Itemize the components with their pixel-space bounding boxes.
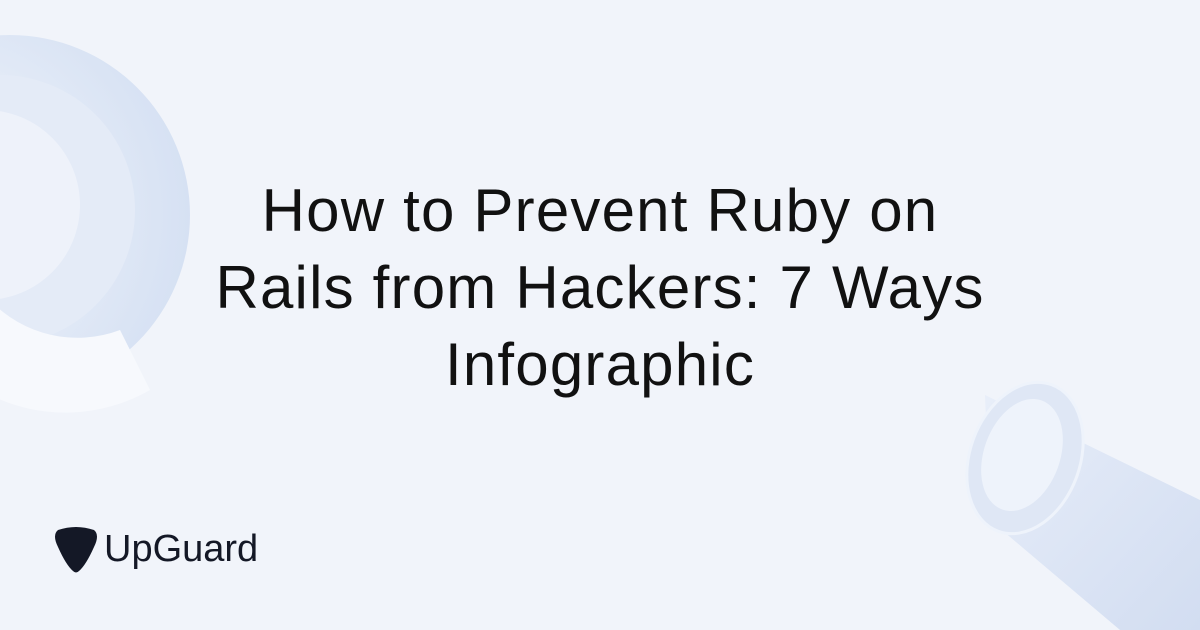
title [215,177,985,398]
title: Rails from Hackers: 7 Ways [215,254,985,321]
decoration: glass cylinder right [947,366,1200,630]
title: How to Prevent Ruby on [262,177,938,244]
logo: UpGuard: UpGuard [104,528,258,570]
icon: guitar pick [55,527,97,572]
title: Infographic [445,331,755,398]
